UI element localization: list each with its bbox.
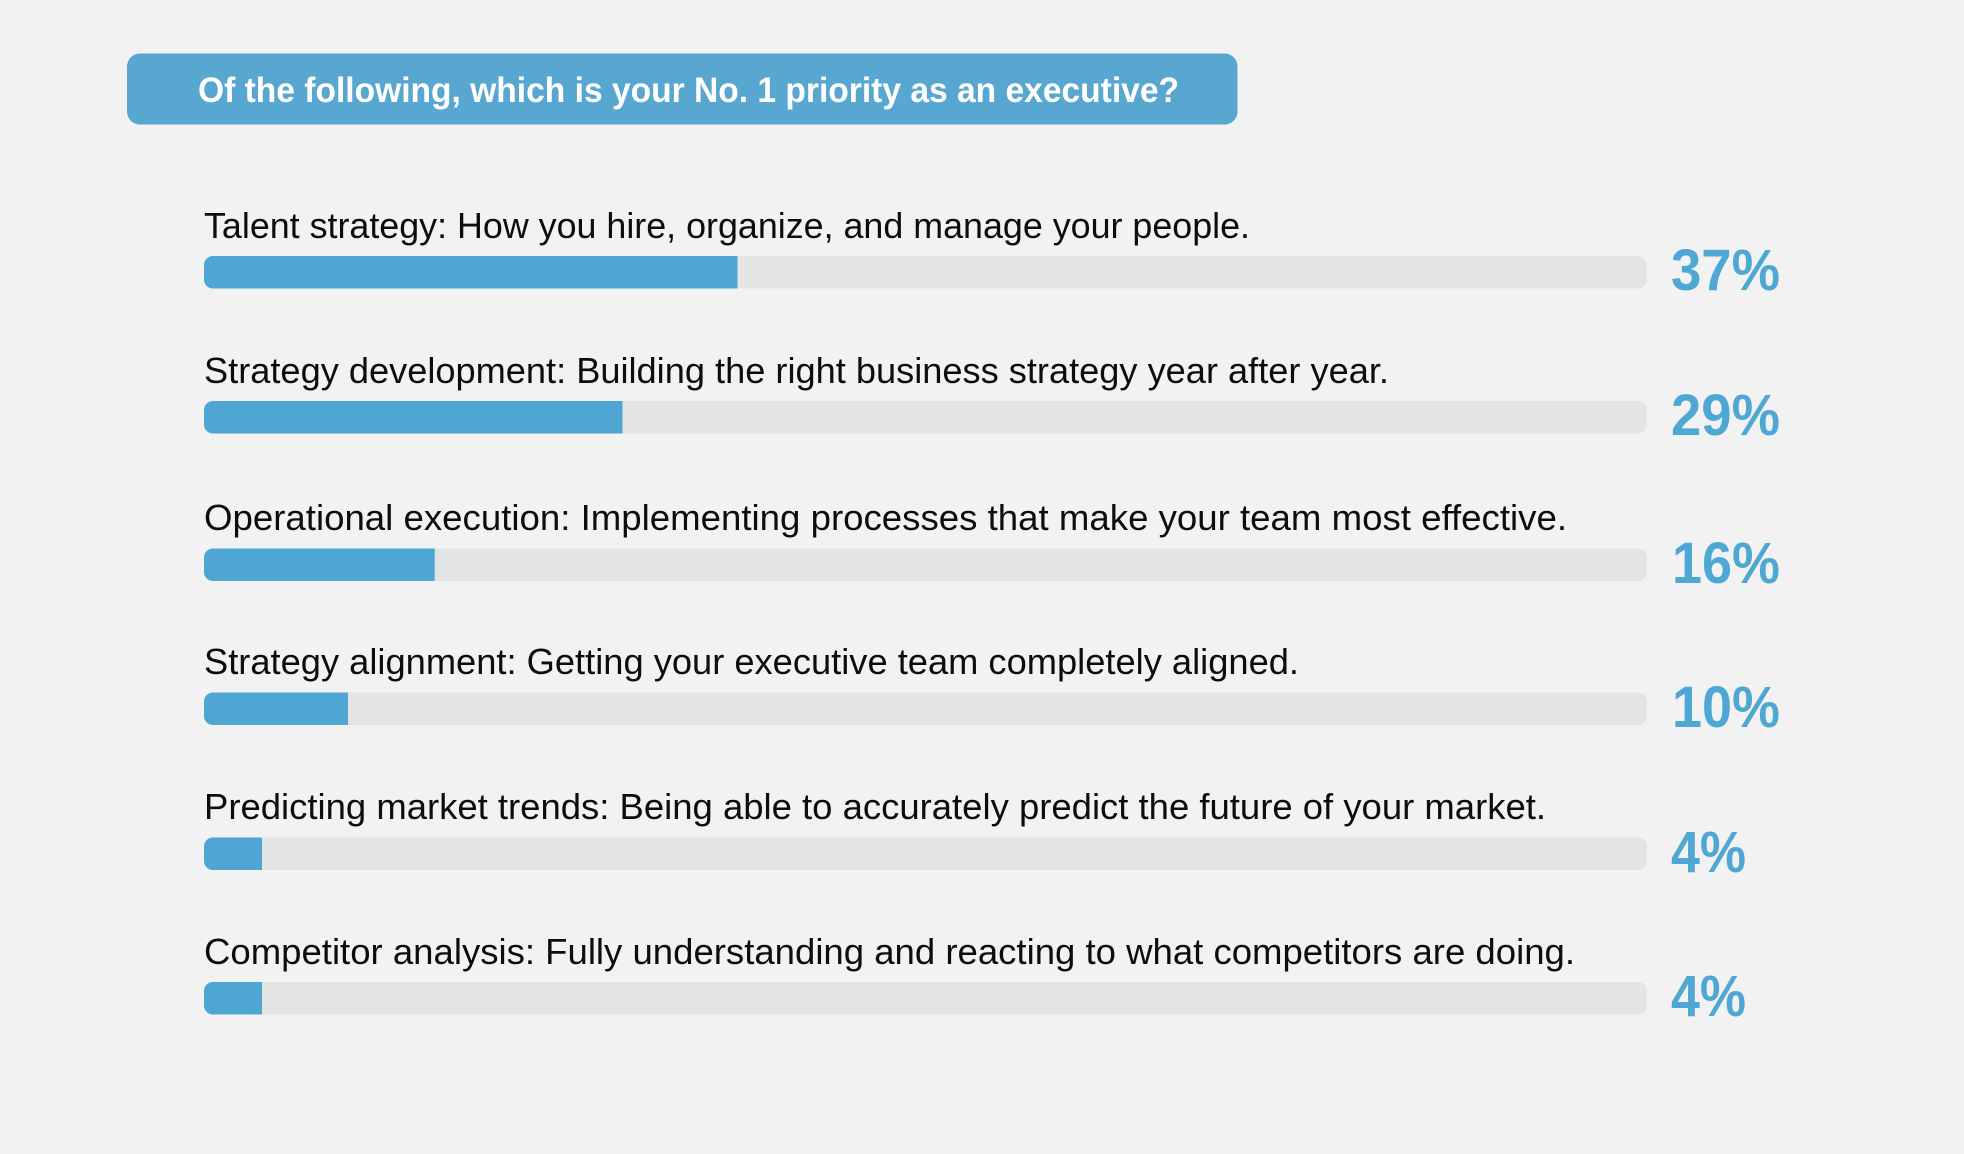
- row: talent strategy 37%: [204, 205, 1780, 303]
- row: strategy development 29%: 29%: [1671, 383, 1780, 448]
- row: operational execution 16%: Operational execution: Implementing processes that make your team most effective.: [204, 497, 1567, 538]
- row: strategy alignment 10%: 10%: [1672, 675, 1780, 740]
- row: strategy development 29%: [204, 350, 1780, 448]
- heading banner: [127, 54, 1238, 124]
- row: strategy development 29%: Strategy development: Building the right business strategy year after year.: [204, 350, 1389, 391]
- row: competitor analysis 4%: 4%: [1671, 964, 1746, 1029]
- row: predicting market trends 4%: [204, 786, 1746, 885]
- row: competitor analysis 4%: Competitor analysis: Fully understanding and reacting to what competitors are doing.: [204, 931, 1575, 972]
- row: strategy alignment 10%: Strategy alignment: Getting your executive team completely aligned.: [204, 641, 1299, 682]
- row: strategy alignment 10%: [204, 641, 1780, 740]
- row: operational execution 16%: 16%: [1672, 531, 1780, 596]
- heading banner: Of the following, which is your No. 1 priority as an executive?: [198, 71, 1179, 110]
- row: operational execution 16%: [204, 497, 1780, 596]
- row: competitor analysis 4%: [204, 931, 1746, 1029]
- row: predicting market trends 4%: Predicting market trends: Being able to accurately predict the future of your market.: [204, 786, 1546, 827]
- row: predicting market trends 4%: 4%: [1671, 820, 1746, 885]
- row: talent strategy 37%: 37%: [1671, 238, 1780, 303]
- row: talent strategy 37%: Talent strategy: How you hire, organize, and manage your people.: [204, 205, 1250, 246]
